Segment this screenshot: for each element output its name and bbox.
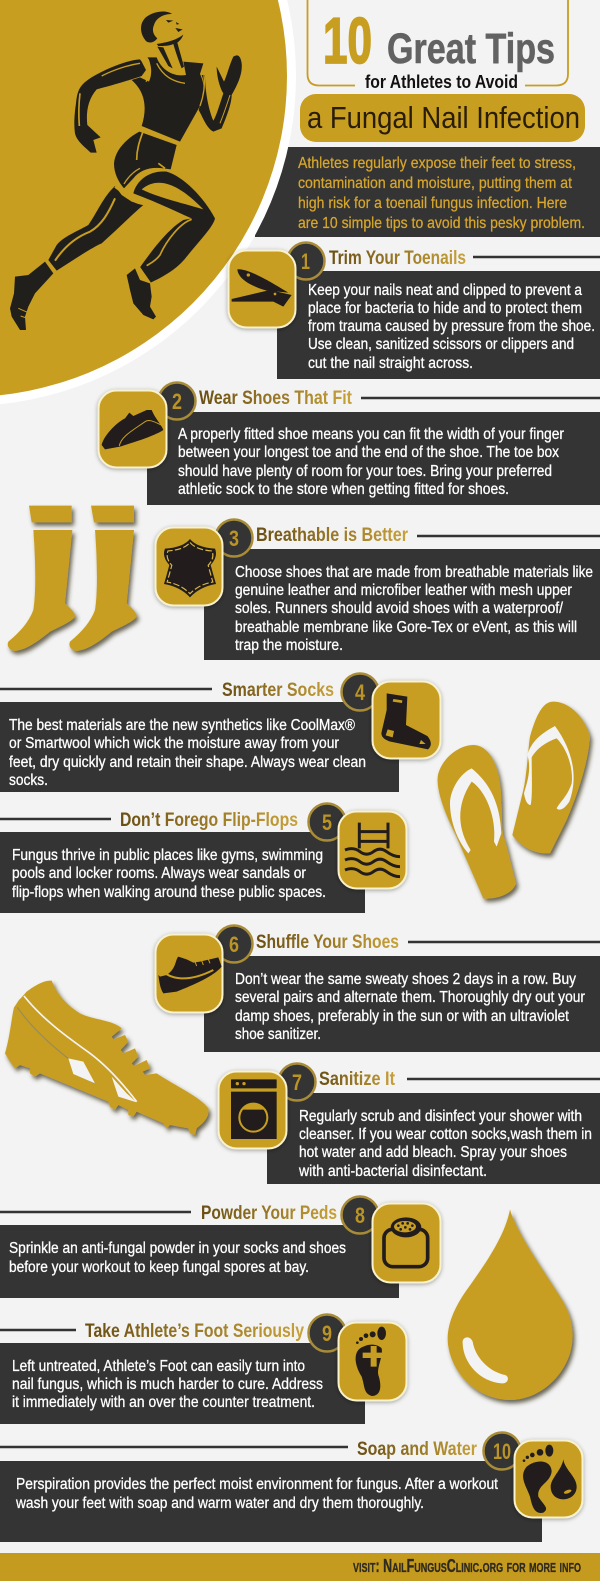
title frame xyxy=(308,0,568,86)
tip 8: 8 xyxy=(355,1203,365,1228)
tip 2 xyxy=(98,382,600,505)
tip 2: athletic sock to the store when getting fitted for shoes. xyxy=(178,481,509,498)
tip 1: cut the nail straight across. xyxy=(308,355,473,372)
intro panel: high risk for a toenail fungus infection. Here xyxy=(298,195,567,212)
tip 1: Trim Your Toenails xyxy=(329,247,466,269)
tip 6: shoe sanitizer. xyxy=(235,1026,321,1043)
tip 10: Soap and Water xyxy=(357,1438,477,1460)
tip 4: The best materials are the new synthetics like CoolMax® xyxy=(9,717,355,734)
tip 4: feet, dry quickly and retain their shape. Always wear clean xyxy=(9,754,366,771)
tip 9: nail fungus, which is much harder to cure. Address xyxy=(12,1376,323,1393)
tip 9: it immediately with an over the counter treatment. xyxy=(12,1394,315,1411)
tip 2: 2 xyxy=(172,389,182,414)
tip 7 xyxy=(218,1064,600,1184)
tip 5: 5 xyxy=(322,810,332,835)
tip 4: or Smartwool which wick the moisture away from your xyxy=(9,735,340,752)
tip 9: Left untreated, Athlete’s Foot can easily turn into xyxy=(12,1358,305,1375)
illustration: water drop xyxy=(448,1209,573,1400)
tip 4: socks. xyxy=(9,772,48,789)
icon: powder shaker xyxy=(372,1204,440,1282)
icon: sneaker xyxy=(156,934,222,1012)
tip 9 xyxy=(0,1314,406,1424)
icon: running shoe xyxy=(98,390,166,468)
icon: pool ladder and water xyxy=(338,812,406,888)
tip 5 xyxy=(0,804,406,913)
title xyxy=(300,0,585,142)
tip 10: wash your feet with soap and warm water and dry them thoroughly. xyxy=(15,1495,424,1512)
tip 8: before your workout to keep fungal spores at bay. xyxy=(9,1259,309,1276)
gold circle with runner xyxy=(0,0,296,406)
flip-flop straps xyxy=(450,726,574,853)
title: Great Tips xyxy=(387,25,555,73)
tip 5: pools and locker rooms. Always wear sandals or xyxy=(12,865,307,882)
tip 3: Breathable is Better xyxy=(256,524,408,546)
tip 7: 7 xyxy=(292,1070,302,1095)
tip 1 xyxy=(228,242,600,379)
title: 10 xyxy=(323,4,372,77)
intro panel: contamination and moisture, putting them at xyxy=(298,175,572,192)
icon: washing machine xyxy=(218,1072,286,1148)
tip 3 xyxy=(156,520,600,660)
tip 7: with anti-bacterial disinfectant. xyxy=(298,1163,487,1180)
tip 1: 1 xyxy=(301,249,310,274)
icon: leather hide xyxy=(156,528,222,606)
illustration: flip-flops xyxy=(438,702,590,899)
tip 8: Sprinkle an anti-fungal powder in your socks and shoes xyxy=(9,1240,346,1257)
tip 9: 9 xyxy=(322,1321,332,1346)
tip 5: flip-flops when walking around these public spaces. xyxy=(12,884,326,901)
tip 6 xyxy=(156,926,600,1052)
icon: nail clipper xyxy=(228,250,296,328)
tip 10: Perspiration provides the perfect moist environment for fungus. After a workout xyxy=(16,1476,498,1493)
icon: foot with cross xyxy=(338,1322,406,1400)
intro panel xyxy=(255,147,600,237)
tip 5: Fungus thrive in public places like gyms, swimming xyxy=(12,847,323,864)
tip 2: Wear Shoes That Fit xyxy=(199,387,352,409)
tip 10: 10 xyxy=(493,1439,511,1464)
icon: foot and drop xyxy=(514,1440,582,1518)
illustration: cleat xyxy=(5,981,209,1135)
tip 6: 6 xyxy=(229,932,239,957)
tip 4: Smarter Socks xyxy=(222,679,334,701)
illustration: socks xyxy=(8,506,137,651)
footer xyxy=(0,1553,600,1581)
tip 7: Sanitize It xyxy=(319,1068,395,1090)
runner silhouette xyxy=(10,11,242,330)
tip 3: 3 xyxy=(229,526,239,551)
tip 6: Shuffle Your Shoes xyxy=(256,931,399,953)
icon: sock xyxy=(372,682,440,758)
tip 5: Don’t Forego Flip-Flops xyxy=(120,809,298,831)
tip 8 xyxy=(0,1196,440,1298)
tip 8: Powder Your Peds xyxy=(201,1202,337,1224)
tip 4: 4 xyxy=(355,680,366,705)
tip 4 xyxy=(0,674,440,792)
tip 9: Take Athlete’s Foot Seriously xyxy=(85,1320,304,1342)
tip 3: trap the moisture. xyxy=(235,637,343,654)
tip 10 xyxy=(0,1432,582,1542)
title: for Athletes to Avoid xyxy=(365,71,518,92)
